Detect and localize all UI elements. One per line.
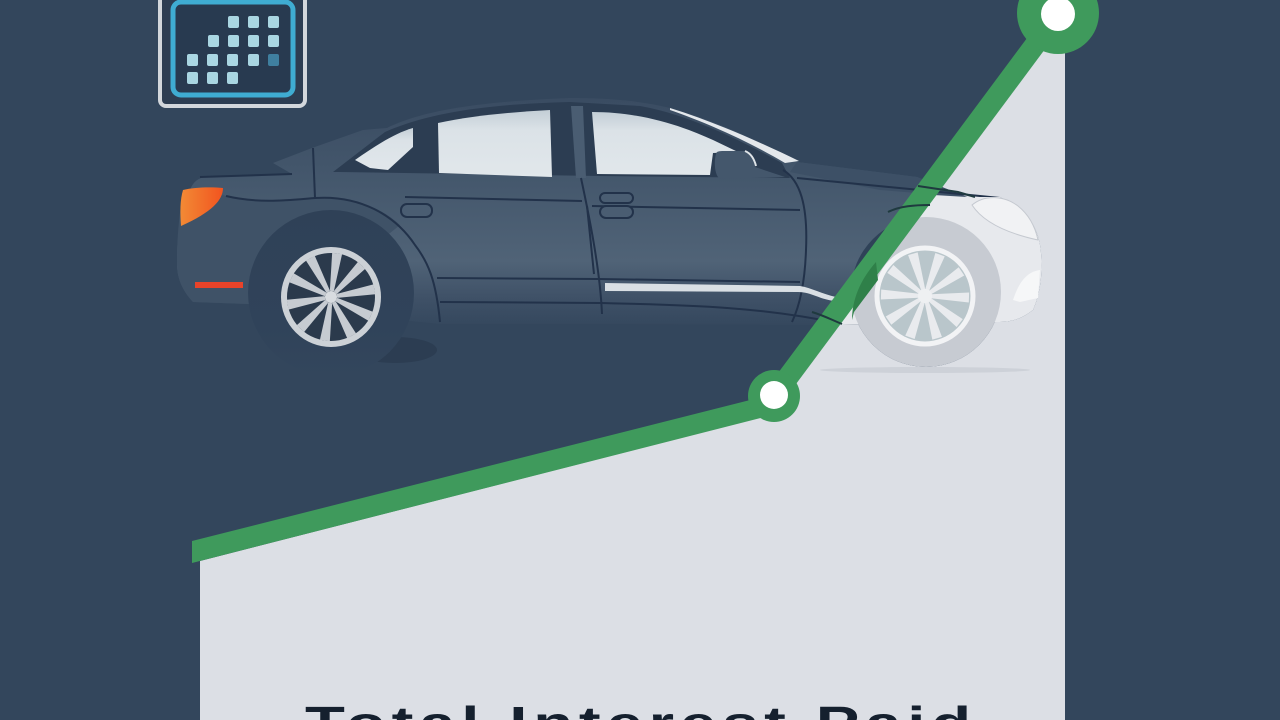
light area under the line chart: [200, 14, 1065, 720]
light car body: [840, 190, 1042, 325]
icon: calendar: [160, 0, 305, 106]
chrome roof trim: [670, 108, 799, 163]
rear reflector: [195, 282, 243, 288]
chart point: top: [1017, 0, 1099, 54]
rear quarter window: [355, 128, 413, 170]
line chart: rising green line: [192, 0, 1099, 563]
headlight: [972, 198, 1038, 240]
chart point: middle: [748, 370, 800, 422]
door handles: [401, 193, 633, 218]
darker tire seen through line: [852, 262, 878, 320]
chrome side strip: [605, 283, 836, 301]
car body: [177, 98, 1042, 325]
light front of car: [820, 190, 1042, 373]
front tire: [851, 217, 1001, 367]
fog lamp: [1013, 270, 1040, 302]
car shadow: [353, 337, 437, 363]
trunk lines: [200, 148, 1000, 324]
front wheel arch, dark side: [851, 217, 1001, 367]
pillar: [571, 106, 586, 178]
rear wheel: [248, 210, 414, 376]
mirror: [715, 151, 785, 179]
rear quarter shade: [177, 193, 400, 305]
rear door window: [438, 110, 552, 177]
car illustration: [177, 98, 1042, 376]
front wheel: [874, 246, 976, 346]
light ground shadow: [820, 367, 1030, 373]
car lines over line: [812, 186, 975, 324]
window frame: [333, 102, 790, 178]
infographic canvas: [158, 0, 1099, 720]
front door window: [592, 112, 738, 175]
hood shade: [790, 162, 967, 197]
tail lamp: [180, 187, 223, 226]
